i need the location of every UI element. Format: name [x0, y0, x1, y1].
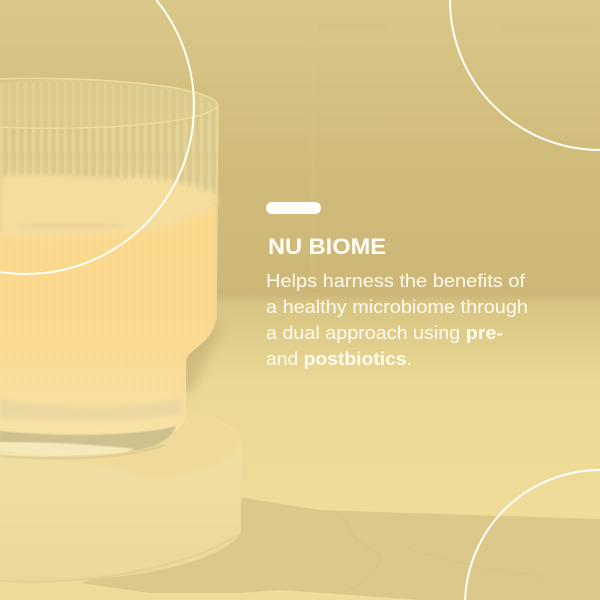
glass overhang shadow on table — [186, 324, 220, 394]
speckled ripple band — [0, 400, 182, 420]
decorative circle top right — [450, 0, 600, 150]
stand bottom edge — [0, 535, 238, 582]
milk and lower glass body — [0, 205, 216, 457]
table cracks — [335, 511, 380, 592]
stand top face — [60, 412, 240, 476]
right glass edge — [216, 107, 218, 320]
glass base edge — [0, 445, 165, 458]
decorative circle bottom right — [465, 470, 600, 600]
dark base ripple band — [0, 426, 176, 451]
table surface — [0, 290, 600, 600]
table shadow — [80, 497, 600, 600]
decorative circle top left — [0, 0, 194, 274]
glass — [0, 78, 218, 458]
ribbed texture upper — [202, 109, 216, 114]
wall panel edges — [313, 27, 600, 295]
glass upper body — [0, 79, 218, 235]
ribbed texture over milk — [0, 200, 216, 400]
rim — [0, 78, 218, 128]
foam stain — [27, 224, 113, 228]
foam — [0, 175, 217, 237]
body text: Helps harness the benefits of — [266, 271, 526, 291]
base highlight — [0, 443, 135, 455]
ribbed texture inside rim — [0, 82, 214, 127]
body text: a healthy microbiome through — [266, 297, 528, 317]
body text — [266, 271, 528, 369]
background wall — [0, 0, 600, 300]
accent bar — [266, 202, 321, 214]
body text: and postbiotics . — [266, 349, 412, 369]
white stand — [0, 411, 241, 582]
heading: NU BIOME — [268, 234, 386, 259]
body text: a dual approach using pre- — [266, 323, 503, 343]
